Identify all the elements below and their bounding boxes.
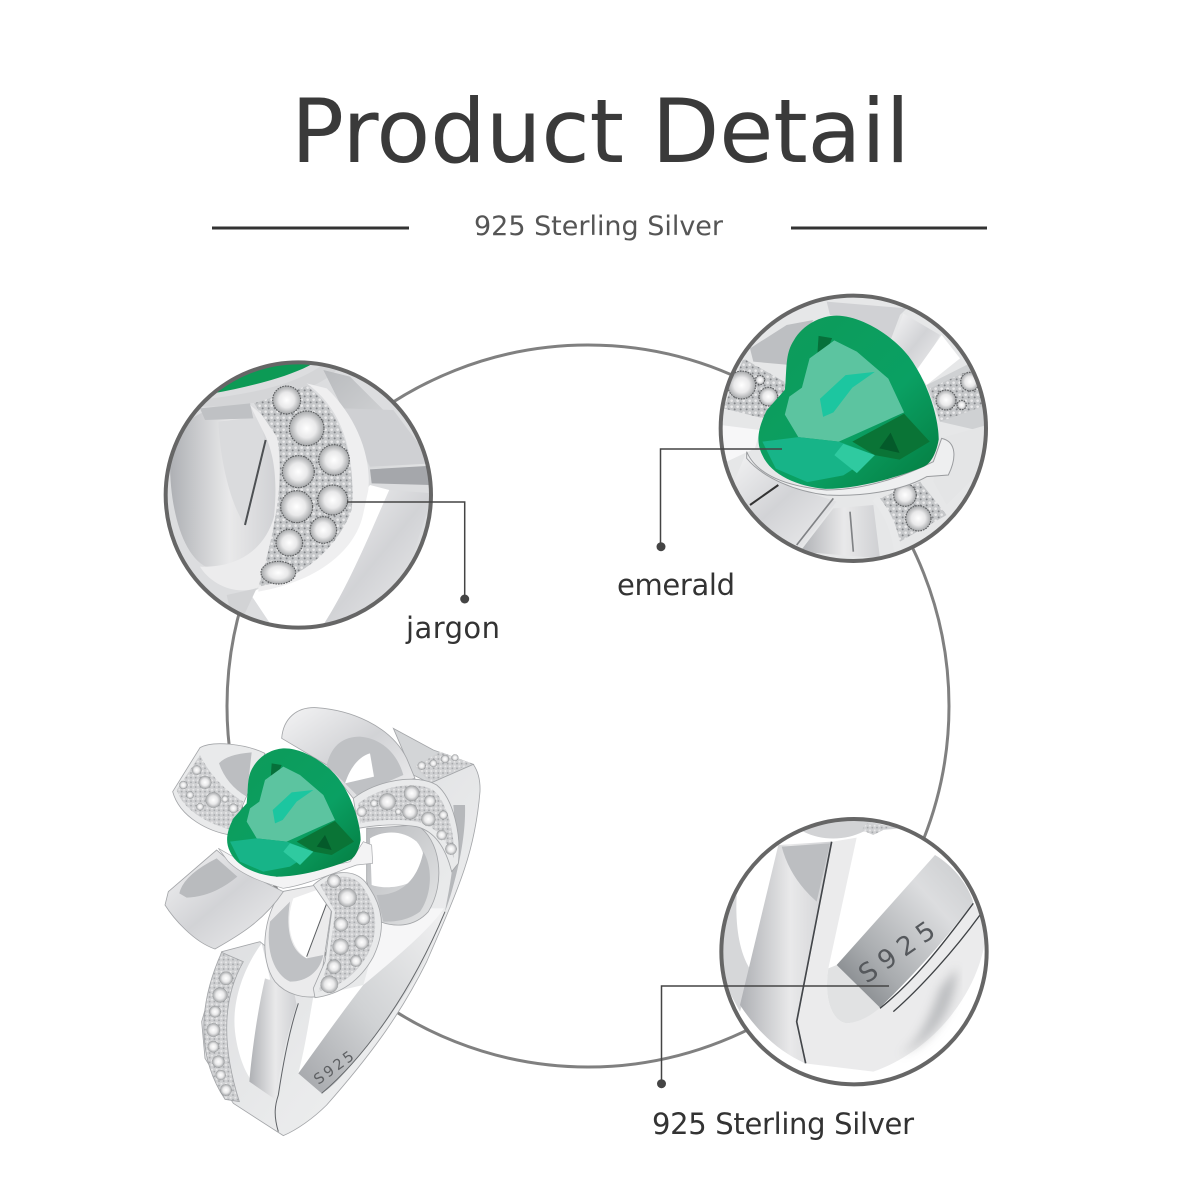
right loop bbox=[367, 825, 439, 925]
ring product illustration bbox=[165, 708, 480, 1136]
upper left lobe bbox=[750, 320, 813, 365]
pave field bbox=[254, 386, 352, 587]
detail circle: emerald bbox=[720, 295, 987, 562]
bottom pave petal bbox=[313, 873, 381, 998]
left shank bbox=[740, 842, 832, 1063]
inner surface bbox=[837, 855, 973, 1008]
left loop bbox=[170, 405, 278, 568]
left pave bbox=[724, 360, 786, 418]
lower right band bbox=[323, 490, 433, 625]
heart emerald bbox=[227, 748, 361, 877]
callout line: silver bbox=[657, 986, 889, 1088]
text: engraved stamp: S925 bbox=[853, 912, 947, 990]
bottom loop bbox=[265, 885, 332, 997]
label: emerald: emerald bbox=[617, 568, 735, 602]
band silhouette bbox=[202, 764, 480, 1136]
white hole bbox=[250, 485, 389, 633]
rim bbox=[200, 405, 281, 590]
heart emerald bbox=[758, 316, 939, 489]
text: ring stamp: S925 bbox=[311, 1046, 359, 1088]
top band bbox=[827, 302, 907, 342]
middle shank bbox=[249, 978, 297, 1100]
detail circle: jargon bbox=[163, 357, 437, 633]
subtitle with rules bbox=[212, 211, 987, 242]
right pave petal bbox=[353, 779, 459, 872]
band strip bbox=[445, 805, 465, 912]
lower shadow bbox=[900, 968, 957, 1055]
back of band bbox=[393, 728, 473, 783]
gem edge bbox=[216, 364, 310, 393]
callout line: emerald bbox=[656, 449, 782, 551]
inner band surface bbox=[298, 912, 444, 1093]
lower silver bbox=[227, 588, 256, 614]
bottom pave bbox=[880, 482, 947, 542]
top lobe bbox=[804, 821, 898, 838]
gem seat bbox=[218, 842, 373, 888]
left sliver bbox=[723, 895, 749, 1012]
title: Product Detail bbox=[291, 80, 910, 183]
left petal bbox=[165, 850, 283, 949]
callout line: jargon bbox=[347, 502, 469, 604]
white hole right bbox=[298, 985, 363, 1073]
white hole left bbox=[234, 943, 270, 1078]
infographic canvas bbox=[164, 95, 989, 1140]
right pave bbox=[930, 370, 982, 422]
back pave strip bbox=[415, 752, 472, 782]
right rim bbox=[258, 383, 369, 592]
big connecting circle bbox=[227, 345, 949, 1067]
label: jargon: jargon bbox=[405, 611, 500, 645]
subtitle with rules: 925 Sterling Silver bbox=[474, 211, 724, 242]
top pave bbox=[863, 824, 888, 835]
notch inner bbox=[827, 965, 880, 1023]
right hole bbox=[363, 908, 444, 985]
top petal bbox=[282, 708, 415, 798]
upper right lobe bbox=[324, 370, 382, 410]
top left pave petal bbox=[173, 744, 265, 835]
left pave strip bbox=[204, 952, 243, 1102]
label: 925 sterling silver: 925 Sterling Silver bbox=[652, 1107, 914, 1141]
lower arcs bbox=[720, 425, 760, 462]
gem seat bbox=[747, 438, 954, 495]
detail circle: 925 sterling silver bbox=[720, 818, 990, 1088]
V shank bbox=[797, 838, 987, 1072]
